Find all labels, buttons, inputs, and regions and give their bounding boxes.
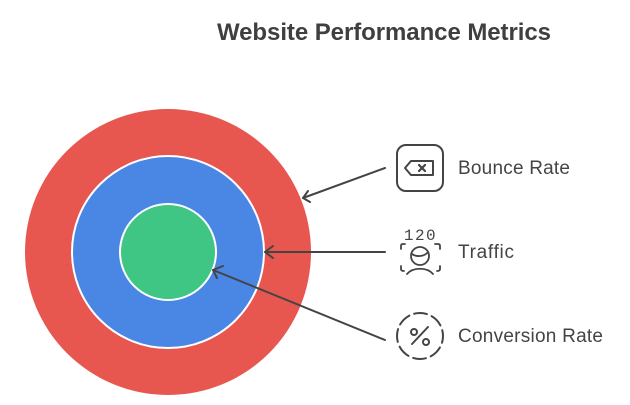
icon: percent in dashed circle bbox=[397, 313, 443, 359]
arrow: conversion rate bbox=[213, 266, 385, 340]
concentric circle diagram bbox=[25, 109, 311, 395]
icon: backspace key bbox=[397, 145, 443, 191]
arrow: traffic bbox=[265, 246, 385, 258]
label: conversion rate: Conversion Rate bbox=[458, 326, 603, 347]
label: bounce rate: Bounce Rate bbox=[458, 158, 570, 179]
arrow: bounce rate bbox=[303, 168, 385, 202]
outer circle: bounce rate bbox=[25, 109, 311, 395]
inner circle: conversion rate bbox=[120, 204, 216, 300]
middle circle: traffic bbox=[72, 156, 264, 348]
label: traffic: Traffic bbox=[458, 242, 514, 263]
icon: traffic counter bbox=[401, 227, 440, 274]
title: Website Performance Metrics bbox=[217, 19, 551, 46]
icon: traffic counter: 120 bbox=[404, 227, 437, 245]
